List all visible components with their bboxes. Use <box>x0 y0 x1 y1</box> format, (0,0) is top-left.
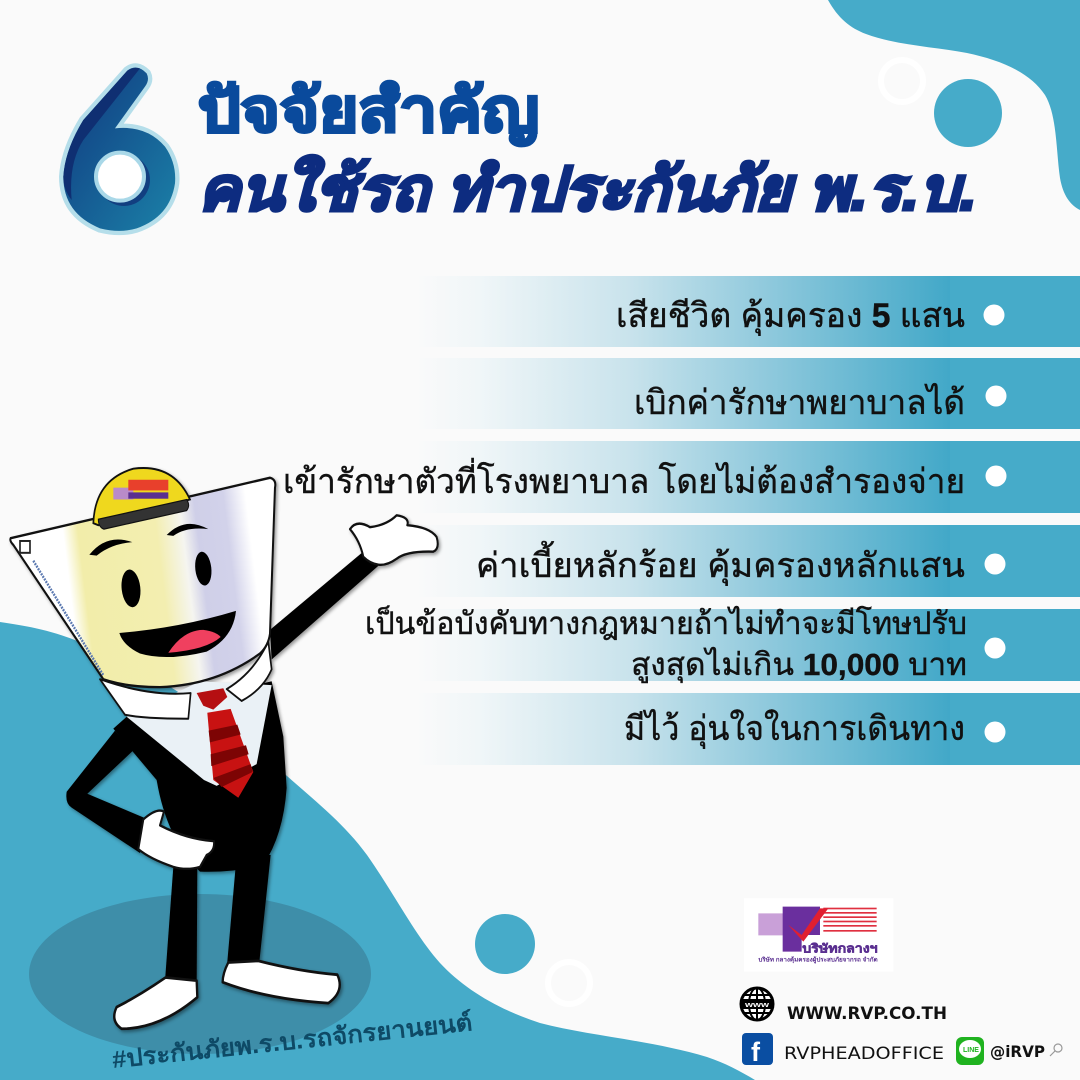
title line 1: ปัจจัยสำคัญ <box>198 77 539 146</box>
item 4 text: ค่าเบี้ยหลักร้อย คุ้มครองหลักแสน <box>476 541 965 586</box>
right hand <box>350 515 438 565</box>
icon: magnifier <box>1050 1044 1062 1056</box>
item 5 text line 1: เป็นข้อบังคับทางกฎหมายถ้าไม่ทำจะมีโทษปรับ <box>365 605 967 641</box>
icon: globe: www <box>744 1000 769 1009</box>
item 5: bar <box>365 605 1080 684</box>
decorative ring bottom <box>548 962 590 1004</box>
document edge print <box>33 561 103 675</box>
item 6: bar <box>415 693 1080 765</box>
collar <box>100 642 272 719</box>
logo name: บริษัทกลางฯ <box>802 942 878 956</box>
big number 6 <box>63 68 175 231</box>
head document <box>10 478 275 687</box>
facebook name: RVPHEADOFFICE <box>784 1044 944 1064</box>
mascot character <box>10 468 438 1029</box>
tie <box>197 688 253 798</box>
hashtag: #ประกันภัยพ.ร.บ.รถจักรยานยนต์ <box>111 1008 474 1074</box>
shoes <box>114 961 340 1029</box>
item 3 text: เข้ารักษาตัวที่โรงพยาบาล โดยไม่ต้องสำรองจ่าย <box>283 458 965 501</box>
item 1 text: เสียชีวิต คุ้มครอง 5 แสน <box>616 297 965 336</box>
item 1: bar <box>415 276 1080 347</box>
item 5 bullet <box>984 638 1006 658</box>
title line 2: คนใช้รถ ทำประกันภัย พ.ร.บ. <box>198 155 977 223</box>
mouth <box>119 611 236 657</box>
item 1 bullet <box>984 304 1004 326</box>
eyes <box>120 550 213 609</box>
icon: line: LINE <box>963 1047 979 1054</box>
item 4 bullet <box>984 554 1006 574</box>
item 5 text line 2: สูงสุดไม่เกิน 10,000 บาท <box>631 647 967 684</box>
item 2 bullet <box>986 386 1006 406</box>
website text: WWW.RVP.CO.TH <box>787 1004 947 1024</box>
tongue <box>168 630 221 653</box>
icon: facebook <box>742 1033 773 1067</box>
item 3 bullet <box>986 466 1006 486</box>
bottom left blob <box>0 622 755 1080</box>
right arm raised <box>270 552 378 659</box>
icon: line <box>956 1037 984 1065</box>
company logo <box>744 898 893 972</box>
item 2 text: เบิกค่ารักษาพยาบาลได้ <box>634 383 965 422</box>
decorative circle bottom <box>475 914 535 974</box>
document barcode <box>20 541 30 553</box>
logo subtitle: บริษัท กลางคุ้มครองผู้ประสบภัยจากรถ จำกัด <box>758 955 878 964</box>
ground shadow ellipse <box>29 894 371 1054</box>
icon: facebook: f <box>751 1037 761 1067</box>
item 6 bullet <box>984 722 1006 742</box>
item 3: bar <box>283 441 1080 513</box>
shirt <box>127 681 272 786</box>
icon: globe <box>741 988 773 1020</box>
top right blob <box>828 0 1080 210</box>
legs <box>165 855 271 985</box>
item 6 text: มีไว้ อุ่นใจในการเดินทาง <box>624 709 965 749</box>
decorative circle top <box>934 79 1002 147</box>
decorative ring top <box>881 60 923 102</box>
item 4: bar <box>415 525 1080 597</box>
jacket body <box>113 681 287 872</box>
left hand <box>138 811 214 869</box>
eyebrows <box>89 524 208 556</box>
item 2: bar <box>415 358 1080 429</box>
left arm on hip <box>66 731 148 853</box>
helmet <box>93 468 190 529</box>
line id: @iRVP <box>990 1042 1045 1061</box>
